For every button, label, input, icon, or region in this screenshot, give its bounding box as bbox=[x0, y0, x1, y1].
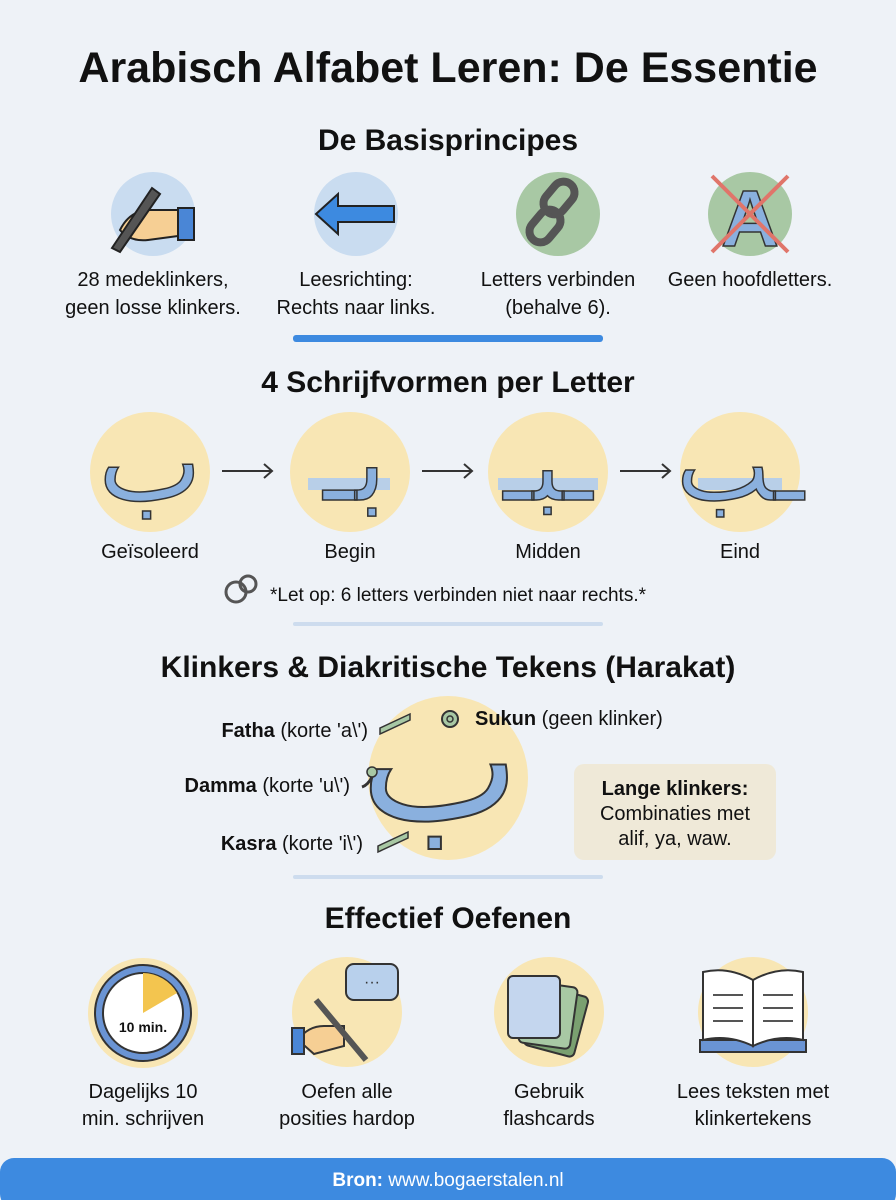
heading: De Basisprincipes: De Basisprincipes bbox=[318, 124, 578, 157]
callout: lange klinkers bbox=[574, 764, 776, 860]
callout: lange klinkers: Lange klinkers: bbox=[602, 778, 748, 800]
arrow bbox=[620, 464, 670, 478]
heading: Klinkers: Klinkers & Diakritische Tekens (Harakat) bbox=[161, 651, 735, 684]
damma: Damma (korte 'u\') bbox=[185, 775, 350, 797]
damma bbox=[185, 767, 377, 797]
panel: oefenen bbox=[82, 957, 830, 1130]
icon: crossed A bbox=[708, 172, 792, 263]
callout: lange klinkers: Combinaties met bbox=[600, 803, 750, 825]
text: letters verbinden: Letters verbinden bbox=[481, 269, 635, 291]
footer bbox=[0, 1158, 896, 1200]
panel: oefenen: klinkertekens bbox=[695, 1108, 811, 1130]
icon: hand with speech bubble: ··· bbox=[364, 974, 380, 991]
callout: lange klinkers: alif, ya, waw. bbox=[618, 828, 732, 850]
panel: oefenen: Lees teksten met bbox=[677, 1081, 830, 1103]
icon: clock: 10 min. bbox=[119, 1019, 167, 1035]
panel: oefenen: Gebruik bbox=[514, 1081, 585, 1103]
arrow bbox=[222, 464, 272, 478]
icon: hand with pen bbox=[111, 172, 195, 256]
form: midden: ـبـ bbox=[503, 407, 594, 524]
form: begin: بـ bbox=[322, 398, 386, 526]
fatha bbox=[221, 714, 410, 742]
labels: min. schrijven bbox=[82, 1108, 204, 1130]
form: geisoleerd bbox=[90, 398, 210, 563]
sukun: Sukun (geen klinker) bbox=[475, 708, 663, 730]
panel: schrijfvormen bbox=[90, 398, 805, 563]
icon: hand with speech bubble bbox=[292, 957, 402, 1067]
panel: oefenen: posities hardop bbox=[279, 1108, 415, 1130]
fatha: Fatha (korte 'a\') bbox=[221, 720, 368, 742]
icon: clock bbox=[88, 958, 198, 1068]
text: 28 medeklinkers: geen losse klinkers. bbox=[65, 297, 241, 319]
footer: Bron: www.bogaerstalen.nl bbox=[332, 1170, 564, 1191]
form: eind: Eind bbox=[720, 541, 760, 563]
note: *Let op: 6 letters verbinden niet naar rechts.* bbox=[270, 585, 647, 606]
panel: oefenen: Oefen alle bbox=[301, 1081, 393, 1103]
note bbox=[226, 576, 647, 606]
form: begin: Begin bbox=[324, 541, 376, 563]
big letter: ب bbox=[360, 663, 520, 861]
text: geen hoofdletters: Geen hoofdletters. bbox=[668, 269, 832, 291]
panel: basisprincipes bbox=[65, 172, 832, 319]
form: geisoleerd: Geïsoleerd bbox=[101, 541, 199, 563]
text: 28 medeklinkers: 28 medeklinkers, bbox=[77, 269, 229, 291]
icon: open book bbox=[698, 957, 808, 1067]
panel: harakat bbox=[185, 663, 776, 861]
form: begin bbox=[290, 398, 410, 563]
icon: chain bbox=[516, 172, 600, 256]
icon: flashcards bbox=[494, 957, 604, 1067]
arrow bbox=[422, 464, 472, 478]
icon: arrow left bbox=[314, 172, 398, 256]
heading: 4 Schrijfvormen: 4 Schrijfvormen per Letter bbox=[261, 366, 635, 399]
text: letters verbinden: (behalve 6). bbox=[505, 297, 611, 319]
icon: crossed A: A bbox=[721, 174, 779, 263]
text: leesrichting: Rechts naar links. bbox=[277, 297, 435, 319]
title: Arabisch Alfabet Leren: De Essentie bbox=[78, 44, 818, 92]
heading: Effectief Oefenen: Effectief Oefenen bbox=[325, 902, 571, 935]
labels: Dagelijks 10 bbox=[89, 1081, 197, 1103]
form: midden: Midden bbox=[515, 541, 581, 563]
text: leesrichting: Leesrichting: bbox=[299, 269, 413, 291]
kasra: Kasra (korte 'i\') bbox=[221, 833, 363, 855]
panel: oefenen: flashcards bbox=[503, 1108, 595, 1130]
form: geisoleerd: ب bbox=[98, 398, 202, 526]
form: midden bbox=[488, 407, 608, 563]
form: eind: ـب bbox=[676, 407, 805, 524]
